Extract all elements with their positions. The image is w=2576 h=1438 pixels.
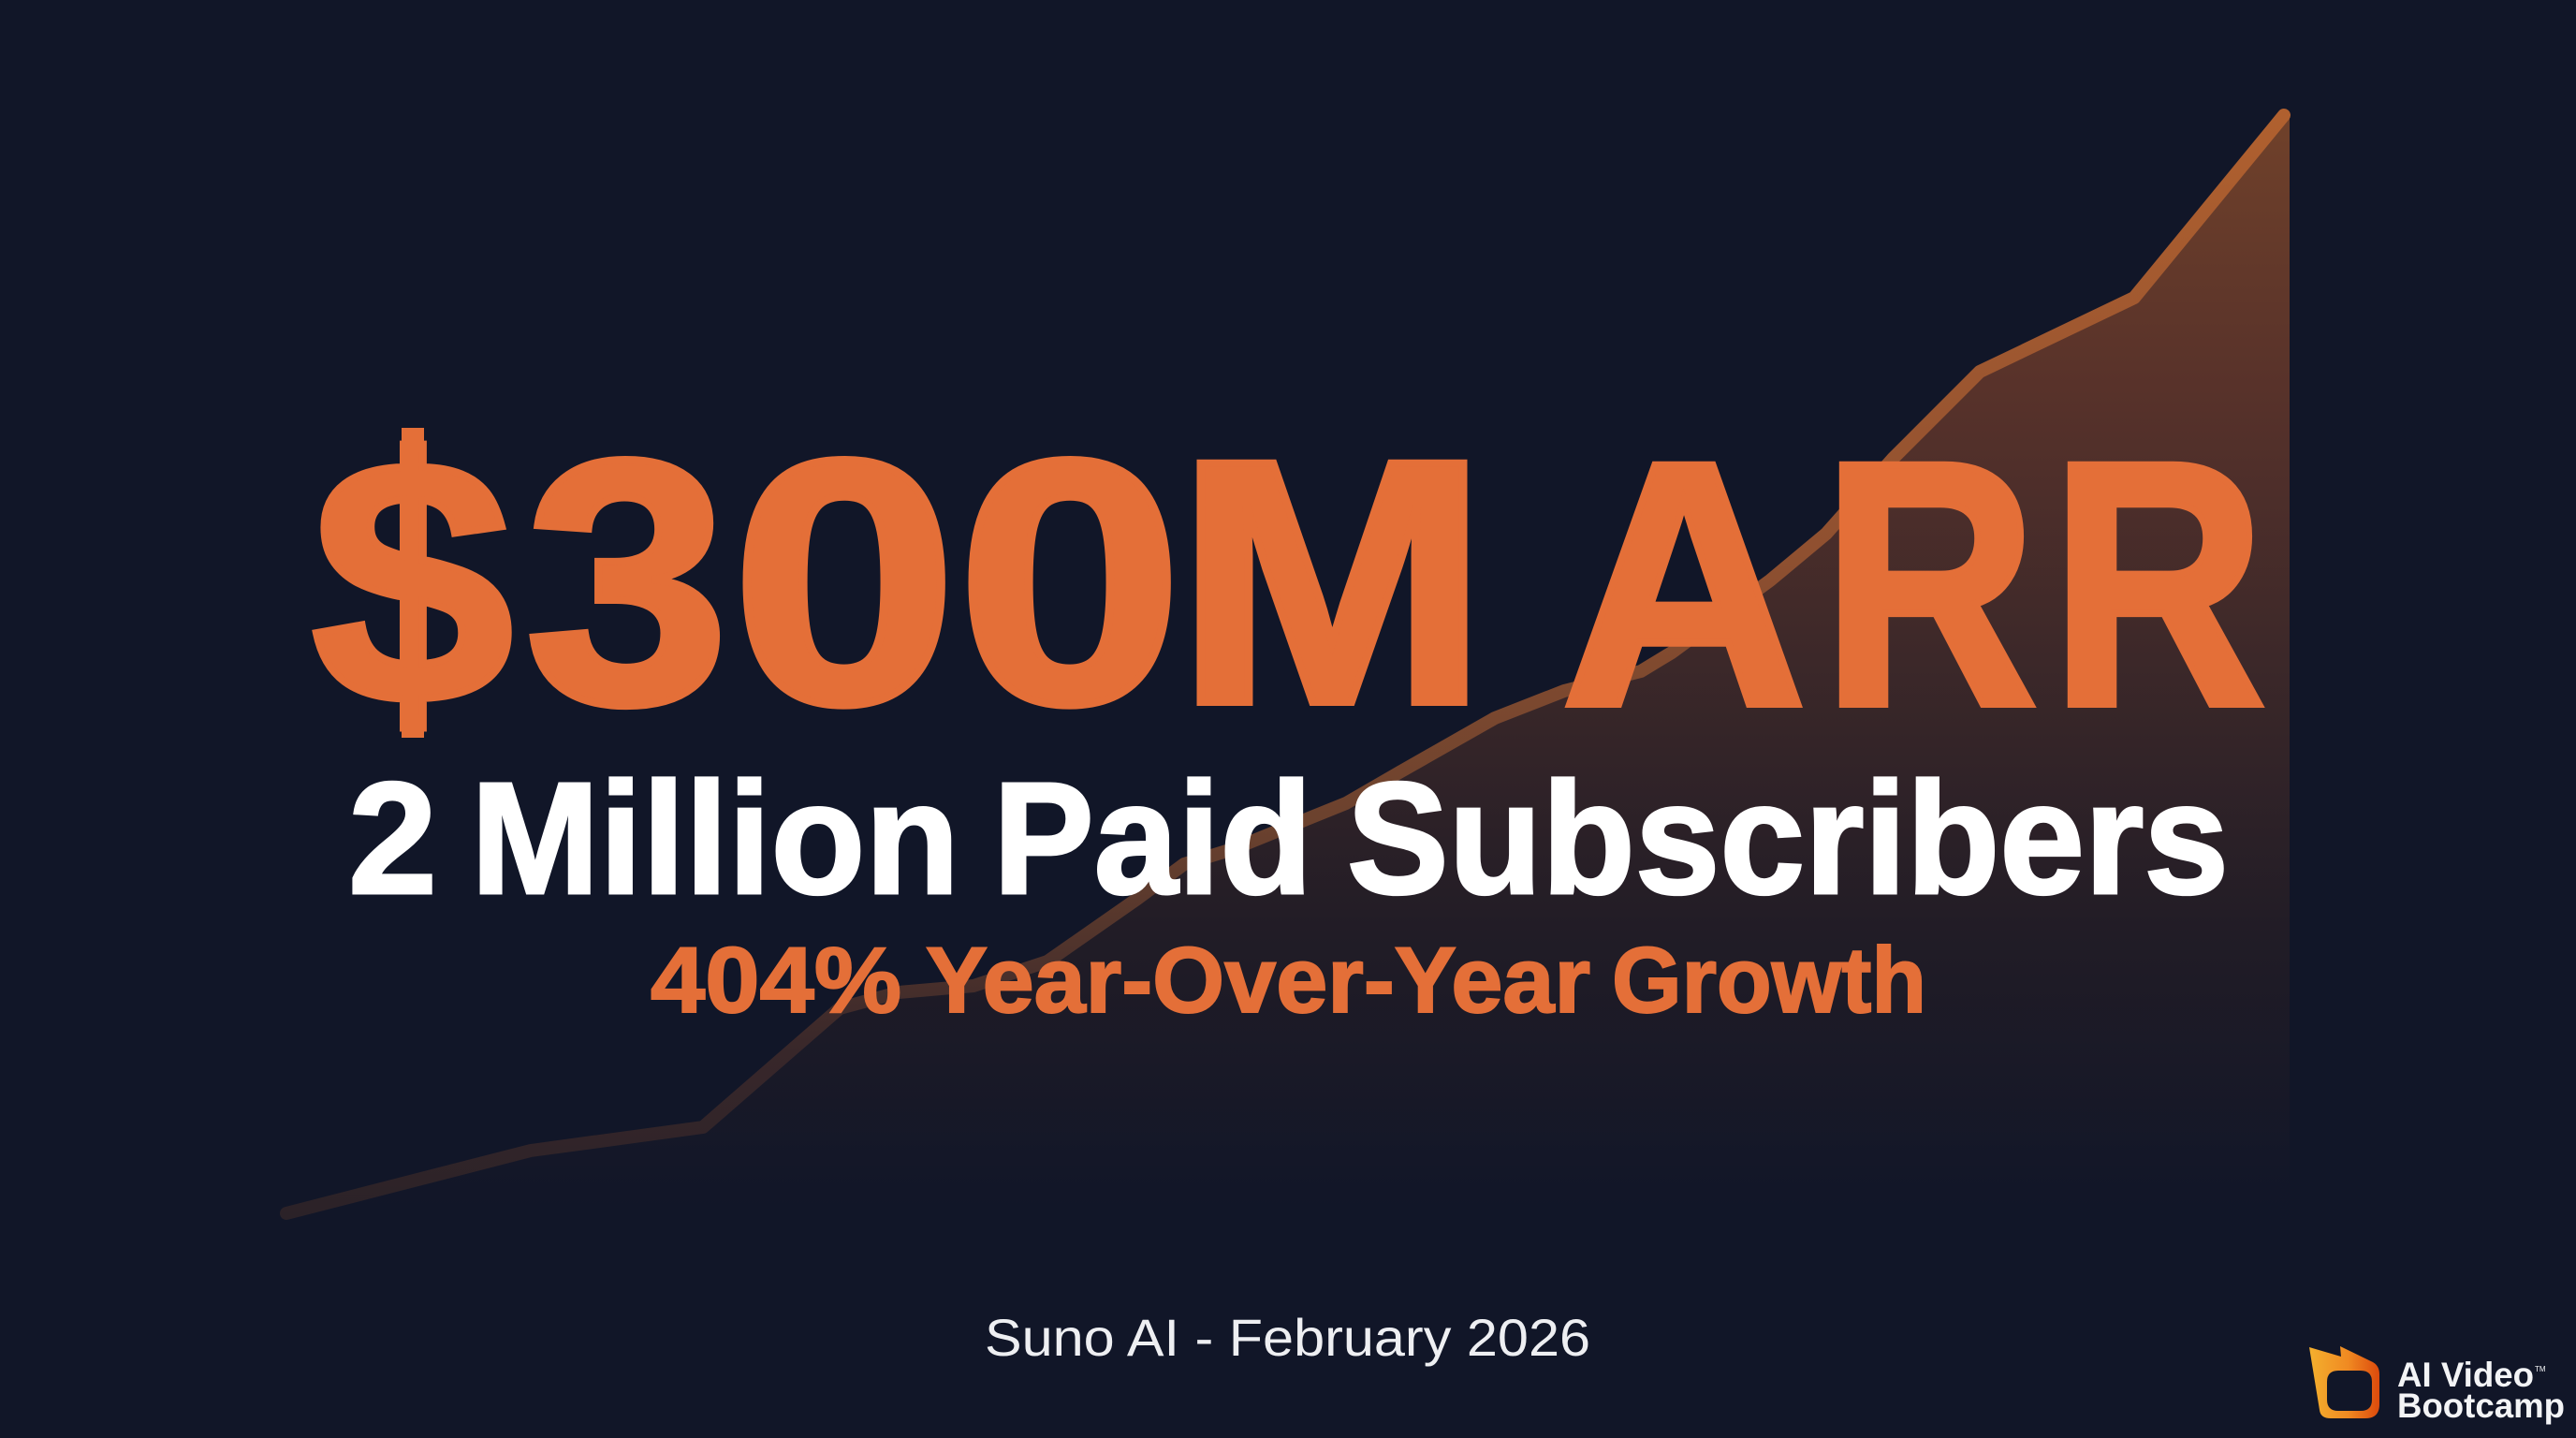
chart trend line — [286, 115, 2284, 1213]
subheading: 2 Million Paid Subscribers: Million — [471, 750, 959, 928]
growth statistic: Year-Over-Year — [926, 928, 1590, 1032]
source and date footer: Suno AI - February 2026 — [985, 1308, 1590, 1367]
icon: flame screen — [2309, 1346, 2379, 1418]
headline: $300M ARR: R — [1822, 389, 2037, 778]
growth statistic: Growth — [1612, 928, 1926, 1032]
headline: $300M ARR: A — [1561, 389, 1807, 778]
subheading: 2 Million Paid Subscribers: Paid — [993, 750, 1312, 928]
logo wordmark — [2397, 1356, 2565, 1425]
subheading: 2 Million Paid Subscribers — [348, 750, 2229, 928]
logo wordmark: TM — [2535, 1365, 2546, 1373]
logo wordmark: Bootcamp — [2397, 1387, 2565, 1425]
headline: $300M ARR: $ — [312, 388, 513, 776]
headline: $300M ARR: 0 — [731, 388, 958, 776]
headline: $300M ARR: 0 — [957, 388, 1183, 776]
headline: $300M ARR: R — [2051, 389, 2265, 778]
headline: $300M ARR — [312, 388, 2265, 778]
headline: $300M ARR: M — [1176, 388, 1488, 776]
logo: AI Video Bootcamp — [2309, 1346, 2565, 1425]
chart area fill — [286, 115, 2290, 1217]
growth statistic: 404% — [651, 928, 901, 1032]
subheading: 2 Million Paid Subscribers: 2 — [348, 750, 437, 928]
subheading: 2 Million Paid Subscribers: Subscribers — [1347, 750, 2229, 928]
headline: $300M ARR: 3 — [525, 388, 729, 776]
growth statistic — [651, 928, 1926, 1032]
logo wordmark: AI Video — [2397, 1356, 2534, 1394]
growth chart: area and line — [286, 115, 2290, 1217]
